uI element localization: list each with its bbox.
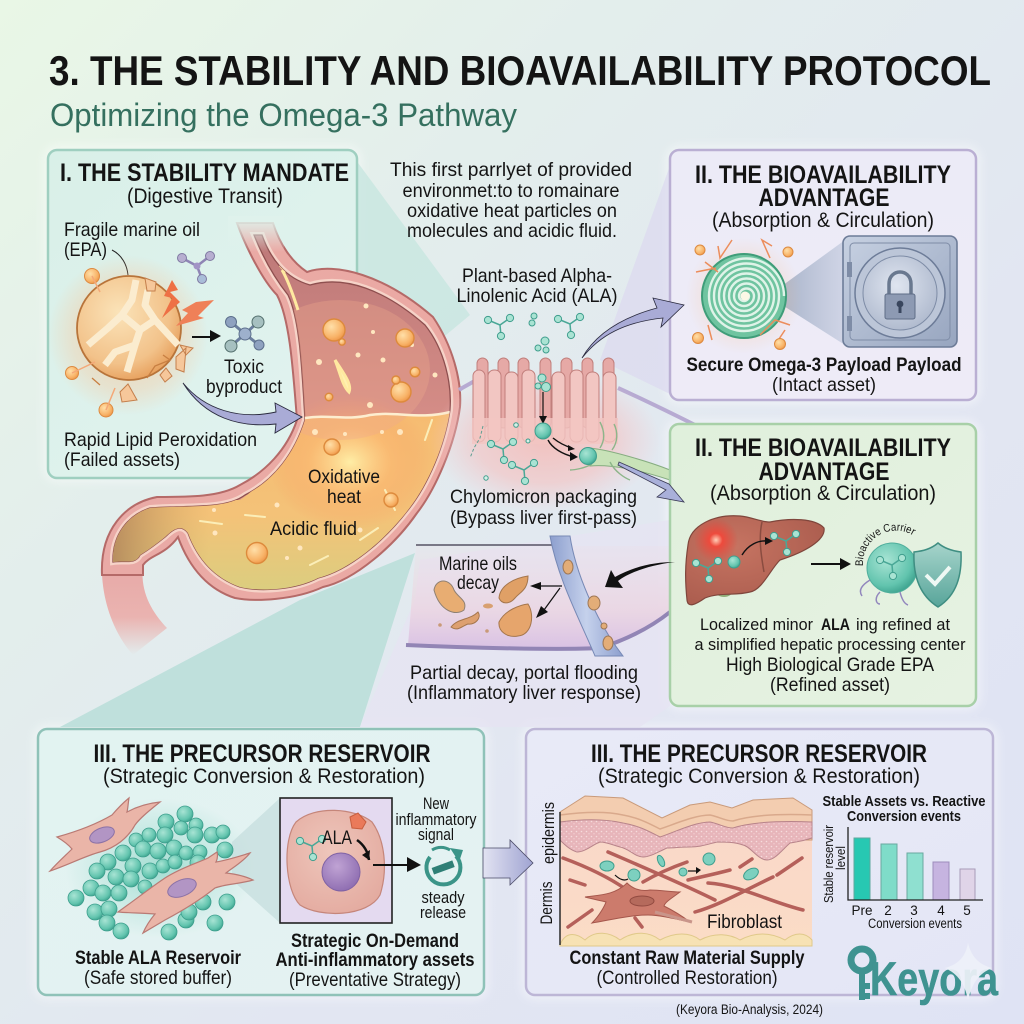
panel heading: III. THE PRECURSOR RESERVOIR [591,740,927,768]
chart title [822,793,986,825]
caption: strategic on-demand: (Preventative Strategy) [289,969,461,991]
panel: precursor reservoir left [38,729,484,995]
bar chart: conversion events: Stable reservoir [821,824,836,903]
caption: localized ALA: ing refined at [856,615,950,634]
bar chart: conversion events: level [833,846,848,870]
label: steady release: steady [422,888,465,907]
icon: bioactive carrier with shield [855,524,962,608]
text block: intro paragraph: oxidative heat particles on [407,200,617,222]
label: plant-based ALA: Linolenic Acid (ALA) [456,285,618,307]
icon: cracked oil sphere [48,255,214,417]
label: fibroblast: Fibroblast [707,911,783,933]
text block: intro paragraph: This first parrlyet of provided [390,159,632,181]
text block: intro paragraph [390,159,632,242]
label: new inflammatory signal: inflammatory [396,810,477,829]
illustration: decaying marine oils and portal vein [406,536,672,656]
panel heading [695,434,951,486]
vault icon [843,236,957,347]
panel subheading: (Absorption & Circulation) [710,482,936,505]
caption: constant raw material supply: Constant Raw Material Supply [570,947,805,969]
panel subheading: (Strategic Conversion & Restoration) [103,765,425,788]
panel heading: ADVANTAGE [758,458,890,486]
caption: high grade EPA [726,654,934,696]
label: byproduct: byproduct [206,376,283,398]
label: chylomicron packaging: Chylomicron packaging [450,486,637,508]
panel: bioavailability advantage bottom [668,422,978,708]
label: new inflammatory signal: signal [418,825,454,844]
label: EPA: (EPA) [64,239,107,261]
label: chylomicron packaging [450,486,637,529]
connector wedge: stability panel to stomach [350,152,470,340]
label: rapid lipid peroxidation: Rapid Lipid Peroxidation [64,429,257,451]
subtitle: Optimizing the Omega-3 Pathway [50,97,517,133]
icon: toxic molecule [225,316,264,352]
caption: stable ALA reservoir: Stable ALA Reservoir [75,947,241,969]
connector wedge: portal panel to reservoir [360,520,670,727]
panel subheading: (Absorption & Circulation) [712,209,934,232]
bar chart: conversion events: 5 [963,903,971,918]
arrow: absorption to top panel [582,298,684,358]
label: oxidative: Oxidative [308,466,380,488]
label: fragile marine oil: Fragile marine oil [64,219,200,241]
caption: strategic on-demand [276,930,475,991]
label: heat: heat [327,486,362,508]
bar chart: conversion events: 2 [884,903,892,918]
chart title: Stable Assets vs. Reactive [822,793,986,810]
caption: constant raw material supply [570,947,805,989]
label: steady release: release [420,903,466,922]
caption: intact asset: (Intact asset) [772,374,876,396]
panel heading: II. THE BIOAVAILABILITY [695,434,951,462]
caption: stable ALA reservoir [75,947,241,989]
illustration: intestinal wall with villi [430,358,695,512]
illustration: stomach [100,216,460,655]
caption: secure payload: Secure Omega-3 Payload Payload [686,354,962,376]
caption: localized ALA: a simplified hepatic processing center [694,635,966,654]
arrow: reservoir to skin [483,840,533,885]
label: partial decay: (Inflammatory liver response) [407,682,641,704]
label: toxic: Toxic [224,356,264,378]
logo: Keyora [851,943,999,1005]
panel subheading: (Digestive Transit) [127,185,283,208]
beam from spiral to vault [768,240,845,345]
label: marine oils: Marine oils [439,553,517,575]
spiral icon [686,238,802,354]
caption: strategic on-demand: Anti-inflammatory assets [276,949,475,971]
arrow: cell to release [373,857,421,872]
panel heading: ADVANTAGE [758,184,890,212]
illustration: ALA spheres and fibroblasts [50,798,280,940]
bar chart: conversion events: 3 [910,903,918,918]
pointer line [112,250,128,275]
label: failed assets: (Failed assets) [64,449,180,471]
label: dermis: Dermis [537,882,556,924]
label: steady release [420,888,466,922]
connector wedge: stomach to reservoir panel [60,553,415,727]
label: acidic fluid: Acidic fluid [270,518,357,540]
panel heading [695,161,951,212]
panel heading: III. THE PRECURSOR RESERVOIR [94,740,430,768]
illustration: skin cross-section [560,796,812,946]
panel: precursor reservoir right [526,729,993,995]
panel: bioavailability advantage top [670,150,976,400]
arrow: absorption to bottom panel [618,462,684,502]
panel heading: II. THE BIOAVAILABILITY [695,161,951,189]
text block: intro paragraph: molecules and acidic fluid. [407,220,617,242]
label: partial decay [407,662,641,704]
bar chart: conversion events [821,824,983,931]
panel subheading: (Strategic Conversion & Restoration) [598,765,920,788]
panel: stability mandate [48,150,357,478]
label: partial decay: Partial decay, portal flooding [410,662,638,684]
caption: stable ALA reservoir: (Safe stored buffer) [84,967,232,989]
label: chylomicron packaging: (Bypass liver first-pass) [450,507,637,529]
icon: small molecule [178,252,214,284]
bar chart: conversion events: Conversion events [868,916,962,931]
caption: constant raw material supply: (Controlled Restoration) [596,967,778,989]
arrow: liver to carrier [811,558,851,570]
icon: ALA molecules [484,313,584,353]
connector wedge: intestine to bioavailability panel [600,160,672,395]
label: plant-based ALA: Plant-based Alpha- [462,265,612,287]
caption: localized ALA [694,615,966,654]
bar chart: conversion events: 4 [937,903,945,918]
arrow: liver to portal vein [605,562,675,588]
caption: strategic on-demand: Strategic On-Demand [291,930,459,952]
caption: high grade EPA: High Biological Grade EPA [726,654,934,676]
label: plant-based ALA [456,265,618,307]
illustration: cell inset [280,798,392,923]
icon: bioactive carrier with shield: Bioactive Carrier [855,524,916,566]
text block: intro paragraph: environmet:to to romainare [402,180,620,202]
liver icon [686,516,824,605]
label: decay: decay [457,572,499,594]
label: new inflammatory signal [396,794,477,844]
label: ALA: ALA [322,827,352,849]
caption: localized ALA: ALA [821,615,850,634]
bar chart: conversion events: Pre [851,903,873,918]
panel heading: I. THE STABILITY MANDATE [60,159,349,187]
icon: release cycle [426,847,463,884]
citation: (Keyora Bio-Analysis, 2024) [676,1002,823,1017]
caption: localized ALA: Localized minor [700,615,813,634]
caption: high grade EPA: (Refined asset) [770,674,890,696]
label: new inflammatory signal: New [423,794,450,813]
arrow: oil into stomach [183,383,302,433]
arrow: to toxic byproduct [192,330,221,342]
label: epidermis: epidermis [539,802,558,864]
chart title: Conversion events [847,808,961,825]
